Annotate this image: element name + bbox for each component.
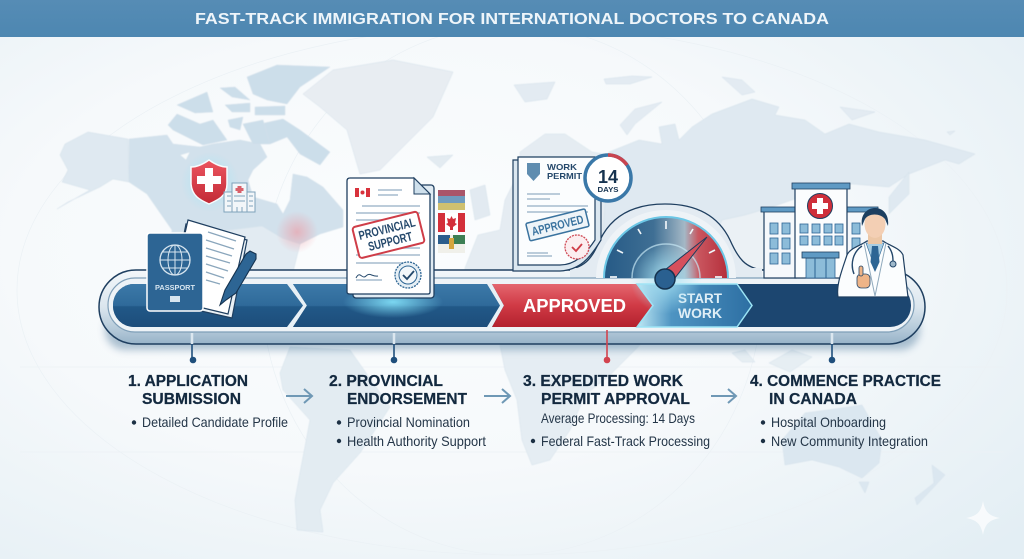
connector: step 2 (391, 344, 397, 363)
canadian flag small (355, 188, 370, 197)
clock: 14 (598, 167, 618, 187)
arrow 3 (711, 389, 736, 403)
shadow (105, 310, 920, 350)
segment 4: start work: WORK (678, 306, 722, 321)
icon: passport and application papers (147, 220, 256, 318)
step 4 text (750, 373, 941, 449)
arrow 1 (286, 389, 312, 403)
step 4 text: New Community Integration (771, 433, 928, 449)
step 3 text: 3. EXPEDITED WORK (523, 373, 683, 390)
icon: sparkle (966, 501, 1000, 535)
step 1 text (128, 373, 288, 430)
step 4 text: 4. COMMENCE PRACTICE (750, 373, 941, 390)
gauge arch housing (560, 204, 763, 285)
Canadian arctic islands (168, 65, 330, 165)
step 2 text: Provincial Nomination (347, 414, 470, 430)
step 3 text: Federal Fast-Track Processing (541, 433, 710, 449)
connector: step 1 (190, 344, 196, 363)
step 4 text: IN CANADA (769, 391, 857, 408)
step 1 band tick (192, 333, 832, 344)
stamp: SUPPORT (367, 229, 414, 254)
arrow 2 (484, 389, 510, 403)
Iceland (427, 155, 453, 168)
Indonesia and New Guinea (769, 350, 812, 372)
South America (280, 347, 390, 532)
papers (170, 220, 247, 318)
Kamchatka (889, 172, 909, 214)
flag: Saskatchewan style (438, 235, 465, 253)
Australia (782, 405, 882, 478)
icon: medical shield and small hospital (181, 152, 255, 212)
gap chevron 1 (287, 284, 307, 327)
approved stamp: APPROVED (530, 212, 585, 239)
arctic Russian islands (514, 76, 955, 135)
icon: speed gauge (596, 210, 736, 314)
Greenland (303, 60, 453, 174)
segment 2 (293, 284, 500, 327)
connector: step 3 (604, 330, 610, 363)
icon: doctor (838, 208, 908, 297)
icon: work permit document with clock (513, 155, 631, 271)
step 3 text: PERMIT APPROVAL (541, 391, 690, 408)
title banner (0, 0, 1024, 37)
title banner: FAST-TRACK IMMIGRATION FOR INTERNATIONAL DOCTORS TO CANADA (195, 11, 829, 28)
navy bar (113, 284, 911, 327)
red location glow (276, 211, 318, 253)
icon: hospital (761, 183, 878, 278)
segment 4: start work (637, 284, 752, 327)
Tasmania (859, 482, 869, 493)
pen (220, 251, 256, 305)
red seal (565, 235, 589, 259)
Alaska (57, 132, 129, 209)
New Zealand (915, 465, 945, 505)
stamp (352, 211, 425, 259)
Canada (129, 135, 343, 270)
gap chevron 2 (487, 284, 504, 327)
step 2 text: 2. PROVINCIAL (329, 373, 443, 390)
Africa (500, 345, 640, 465)
USA (170, 226, 300, 272)
step 2 text: Health Authority Support (347, 433, 486, 449)
step 2 text: ENDORSEMENT (347, 391, 467, 408)
icon: work permit document with clock: PERMIT (547, 171, 583, 181)
segment 4: start work: START (678, 291, 723, 306)
gauge arch cover (570, 268, 762, 280)
inner ring (108, 278, 914, 332)
clock (585, 155, 631, 201)
segment 1 (113, 284, 303, 327)
flag: British Columbia (438, 190, 465, 210)
needle (661, 237, 707, 283)
flag: Canada (438, 213, 465, 232)
outer frame (99, 270, 925, 344)
clock: DAYS (598, 185, 618, 194)
icon: provincial flags (438, 190, 465, 253)
step 1 text: SUBMISSION (142, 391, 241, 408)
crest (527, 163, 540, 181)
segment 3: approved: APPROVED (523, 296, 626, 316)
Europe (465, 134, 610, 272)
glow (343, 286, 443, 318)
step 2 text (329, 373, 486, 449)
icon: work permit document with clock: WORK (547, 162, 578, 172)
icon: provincial support letter (343, 178, 443, 318)
step 3 text: Average Processing: 14 Days (541, 410, 695, 426)
connector: step 4 (829, 344, 835, 363)
Russia and north Asia (600, 99, 975, 272)
seal (395, 262, 421, 288)
step 4 text: Hospital Onboarding (771, 414, 886, 430)
timeline track (99, 268, 925, 350)
world map (57, 60, 975, 532)
passport: PASSPORT (155, 283, 195, 292)
segment 3: approved (492, 284, 653, 327)
step 1 text: Detailed Candidate Profile (142, 414, 288, 430)
step 3 text (523, 373, 710, 449)
step 1 text: 1. APPLICATION (128, 373, 248, 390)
south Asia (700, 207, 790, 272)
UK (470, 185, 490, 220)
stamp: PROVINCIAL (357, 215, 417, 243)
